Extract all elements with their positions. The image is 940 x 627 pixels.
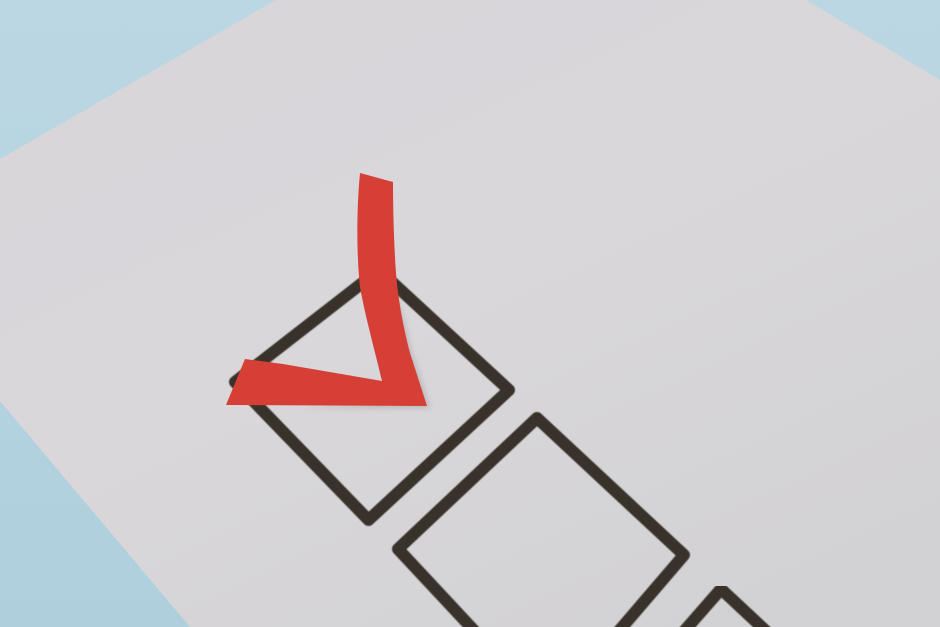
checkbox: third (cropped) bbox=[672, 589, 781, 627]
check mark shadow bbox=[300, 290, 430, 408]
checkbox: second (empty) bbox=[398, 418, 684, 627]
red check mark bbox=[226, 173, 427, 406]
checkbox: first (checked) bbox=[235, 270, 509, 520]
